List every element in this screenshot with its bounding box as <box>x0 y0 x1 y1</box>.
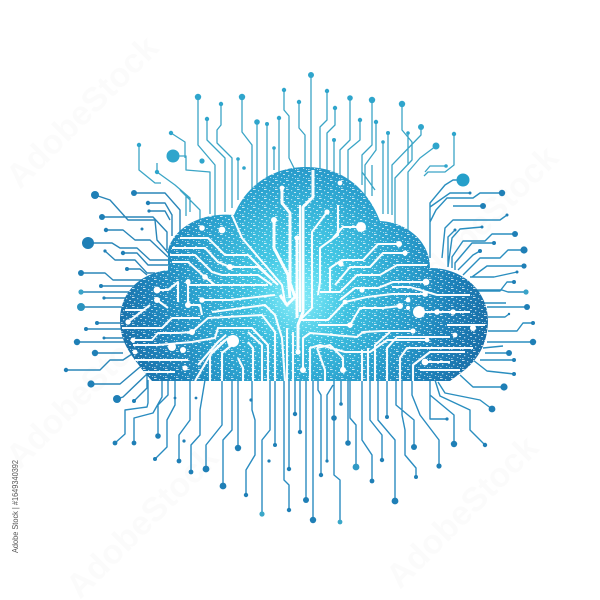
white nodes <box>125 181 476 373</box>
traces: top <box>139 75 454 232</box>
infographic canvas <box>12 72 536 553</box>
speckle texture <box>121 167 488 380</box>
stock id text: Adobe Stock | #1649340392 <box>11 459 20 553</box>
terminal nodes <box>137 72 456 174</box>
side and bottom nodes <box>64 190 536 524</box>
cloud <box>120 167 488 381</box>
traces: right <box>430 180 533 445</box>
traces: left <box>66 193 180 401</box>
white circuit traces <box>122 170 485 381</box>
large node: top right <box>456 174 470 186</box>
central glow <box>256 259 340 342</box>
traces: bottom <box>115 380 454 522</box>
